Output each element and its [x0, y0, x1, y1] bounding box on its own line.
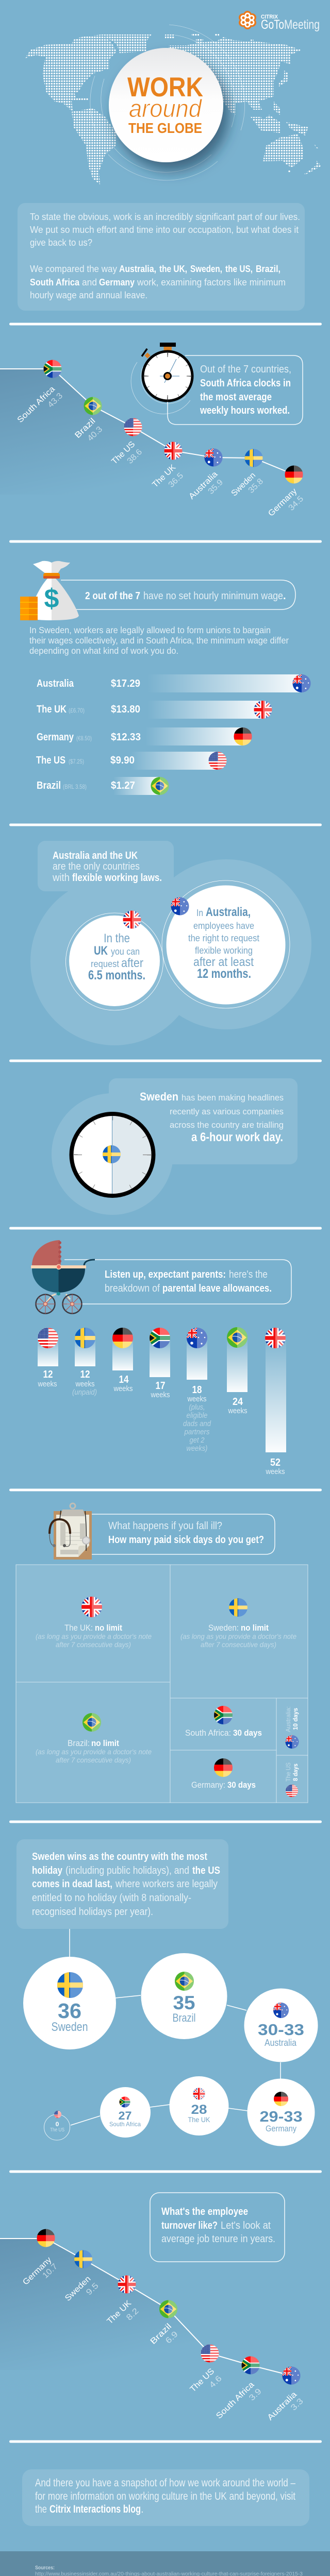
country labels: 35.9: [207, 478, 225, 496]
column: Sweden: 12: [80, 1369, 90, 1380]
column: South Africa: 17: [156, 1380, 165, 1392]
circle: Australia flexible working: Australia,: [206, 905, 251, 919]
country labels: 38.6: [126, 448, 144, 466]
logo: GoToMeeting: [239, 11, 320, 32]
text block: intro second paragraph: work, examining factors like minimum: [137, 277, 286, 287]
bubble: Sweden: [23, 1957, 116, 2049]
cell: Sweden: after 7 consecutive days): [201, 1640, 276, 1649]
title: [127, 72, 203, 136]
country labels: Sweden: [230, 471, 257, 498]
callout: parental leave: breakdown of: [105, 1283, 160, 1294]
callout: employee turnover: turnover like?: [161, 2220, 218, 2231]
cell: Brazil: after 7 consecutive days): [56, 1756, 131, 1764]
country labels: The US: [110, 440, 137, 466]
bar: UK: $13.80: [111, 704, 140, 715]
bar: US: The US: [36, 755, 65, 766]
text block: intro second paragraph: and: [82, 277, 97, 287]
column: Germany: [112, 1328, 133, 1393]
cell: Brazil: (as long as you provide a doctor's note: [36, 1748, 152, 1756]
circle: Australia flexible working: after at least: [193, 955, 254, 969]
stethoscope: [50, 1511, 90, 1551]
callout: minimum wage: 2 out of the 7: [85, 590, 140, 602]
title disc: [109, 48, 223, 162]
column: Australia: [183, 1328, 211, 1453]
bubble: US: [44, 2111, 70, 2140]
title: around: [129, 95, 202, 123]
column: Australia: 18: [192, 1384, 202, 1396]
bar: Brazil: (BRL 3.58): [63, 783, 87, 790]
bar: Germany: [37, 727, 252, 746]
divider: [9, 1489, 322, 1491]
country labels: 43.3: [46, 392, 64, 410]
bubble: UK: 28: [191, 2103, 207, 2117]
cell: Sweden: [180, 1598, 296, 1649]
circle: Australia flexible working: the right to request: [188, 933, 259, 943]
column: South Africa: [150, 1328, 170, 1399]
chart: sick days treemap: [16, 1565, 308, 1803]
bar: US: [36, 752, 227, 770]
country labels: Brazil: [73, 417, 97, 440]
panel: conclusion: [22, 2469, 309, 2526]
callout: minimum wage: .: [283, 590, 286, 602]
column: UK: [265, 1328, 286, 1476]
bubble: South Africa: South Africa: [109, 2121, 141, 2128]
country labels: 9.5: [85, 2281, 101, 2297]
icon: clock with Sweden flag: [71, 1114, 154, 1196]
bar: US: $9.90: [110, 755, 135, 766]
cell: South Africa: 30 days: [233, 1728, 262, 1738]
bar: Brazil: [37, 777, 169, 795]
text block: minimum wage detail: In Sweden, workers are legally allowed to form unions to bargain: [29, 625, 271, 635]
bubble: Brazil: Brazil: [172, 2011, 196, 2024]
text block: intro second paragraph: We compared the way: [30, 264, 117, 274]
cell: UK: (as long as you provide a doctor's note: [36, 1632, 152, 1640]
cell: Brazil: no limit: [91, 1738, 119, 1748]
country labels: Brazil: [148, 2322, 173, 2346]
title: WORK: [127, 72, 203, 103]
panel: holiday intro: the US: [192, 1865, 220, 1876]
divider: [9, 323, 322, 326]
text block: intro first paragraph: [30, 212, 300, 248]
decorative arcs around title: [90, 25, 245, 180]
column: UK: weeks: [266, 1467, 285, 1476]
circle: Australia flexible working: employees have: [193, 921, 254, 931]
circle: UK flexible working: after: [121, 956, 143, 970]
column: US: 12: [43, 1369, 53, 1380]
text block: intro second paragraph: South Africa: [30, 277, 80, 287]
circle: UK flexible working: UK: [94, 944, 108, 958]
divider: [9, 2440, 322, 2443]
circle: UK flexible working: 6.5 months.: [88, 968, 145, 982]
bubble: US: 0: [56, 2121, 59, 2128]
text block: minimum wage detail: their wages collectively, and in South Africa, the minimum wage differ: [29, 635, 289, 646]
country labels: 36.5: [167, 471, 185, 489]
cell: UK: The UK:: [64, 1623, 93, 1633]
panel: holiday intro: where workers are legally: [115, 1878, 218, 1890]
logo wordmark: CITRIX: [261, 14, 278, 20]
country labels: 6.9: [164, 2330, 180, 2346]
column: US: [38, 1328, 58, 1388]
circle: UK flexible working: In the: [104, 931, 130, 945]
callout: weekly hours: Out of the 7 countries,: [200, 364, 291, 375]
cell: South Africa: South Africa:: [185, 1728, 231, 1738]
divider: [9, 1227, 322, 1229]
text block: intro first paragraph: give back to us?: [30, 238, 92, 248]
column: Australia: weeks): [187, 1444, 208, 1453]
cell: Australia: 10 days: [292, 1708, 299, 1730]
column: Australia: get 2: [190, 1436, 205, 1445]
bubble: Australia: [244, 1989, 318, 2062]
bar: Brazil: Brazil: [37, 780, 61, 791]
panel: holiday intro: entitled to no holiday (with 8 nationally-: [32, 1892, 191, 1904]
bar chart: minimum wage: [36, 674, 310, 795]
icon: coins: [20, 597, 38, 620]
country labels: [16, 385, 305, 518]
country labels: 4.6: [208, 2374, 224, 2390]
pram wheels: [36, 1294, 82, 1314]
text block: Sweden six hour day: a 6-hour work day.: [191, 1130, 283, 1144]
cell: US: 8 days: [292, 1764, 299, 1781]
column: Australia: weeks: [187, 1395, 206, 1403]
cell: Sweden: no limit: [241, 1623, 269, 1633]
text block: minimum wage detail: [29, 625, 289, 656]
bubble: Germany: Germany: [266, 2124, 296, 2133]
column: South Africa: weeks: [151, 1391, 170, 1399]
column: Sweden: [72, 1328, 97, 1397]
bubble: UK: The UK: [188, 2115, 210, 2124]
column: Brazil: [227, 1327, 248, 1415]
circle: Australia flexible working: flexible working: [195, 945, 253, 956]
panel: flexible working background: [30, 841, 311, 1045]
callout: parental leave: [64, 1260, 291, 1304]
callout: weekly hours: weekly hours worked.: [200, 405, 290, 416]
cell: Sweden: (as long as you provide a doctor's note: [180, 1632, 296, 1640]
text block: intro second paragraph: Australia,: [119, 264, 156, 274]
callout: weekly hours: [168, 355, 303, 425]
callout: sick days: How many paid sick days do you get?: [108, 1534, 264, 1546]
bubble: South Africa: [100, 2087, 151, 2138]
callout: employee turnover: What's the employee: [161, 2206, 248, 2217]
column: Australia: dads and: [183, 1419, 211, 1428]
divider: [9, 2170, 322, 2173]
bubble: Sweden: 36: [58, 1999, 81, 2023]
bubble: South Africa: 27: [119, 2109, 132, 2122]
text block: flexible working laws: [52, 850, 162, 884]
country labels: 34.5: [287, 495, 305, 513]
panel: holiday intro: recognised holidays per year).: [32, 1906, 153, 1918]
bar: Germany: Germany: [37, 732, 74, 743]
country labels: Australia: [187, 470, 220, 501]
panel: sources: [0, 2551, 330, 2576]
country labels: 8.2: [125, 2307, 141, 2323]
column: Sweden: (unpaid): [72, 1388, 97, 1397]
panel: sources: Sources:: [35, 2565, 55, 2571]
callout: employee turnover: [150, 2193, 285, 2262]
country labels: 35.8: [247, 477, 265, 495]
divider: [9, 540, 322, 543]
text block: intro first paragraph: To state the obvious, work is an incredibly significant part of our lives.: [30, 212, 300, 222]
bubble: Sweden: Sweden: [52, 2020, 88, 2034]
callout: parental leave: Listen up, expectant parents:: [105, 1269, 226, 1280]
bar: US: ($7.25): [69, 758, 84, 765]
cell: US: [285, 1762, 299, 1797]
country labels: The UK: [151, 463, 178, 489]
bar: Brazil: $1.27: [111, 780, 135, 791]
cell: US: The US: [285, 1762, 292, 1782]
bar: UK: (£6.70): [69, 707, 85, 714]
text block: intro second paragraph: hourly wage and annual leave.: [30, 290, 147, 300]
callout: employee turnover: Let's look at: [221, 2220, 271, 2231]
cell: Brazil: Brazil:: [68, 1738, 90, 1748]
bar: Germany: $12.33: [111, 732, 141, 743]
logo wordmark: GoTo: [261, 18, 284, 32]
text block: intro first paragraph: We put so much effort and time into our occupation, but what does it: [30, 225, 299, 235]
country labels: 10.7: [41, 2262, 59, 2280]
column: US: weeks: [38, 1380, 57, 1388]
callout: parental leave: here's the: [229, 1269, 268, 1280]
bubble: Australia: 30-33: [258, 2021, 304, 2039]
callout: sick days: [92, 1514, 275, 1554]
cell: Sweden: Sweden:: [208, 1623, 239, 1633]
column: Sweden: weeks: [75, 1380, 95, 1388]
callout: parental leave: parental leave allowances.: [162, 1283, 272, 1294]
text block: flexible working laws: with: [52, 872, 70, 884]
bubble: Germany: 29-33: [260, 2109, 302, 2125]
callout: employee turnover: average job tenure in years.: [161, 2233, 275, 2245]
bar: Germany: (€8.50): [76, 735, 92, 742]
cell: South Africa: [185, 1706, 262, 1738]
bubble: US: The US: [50, 2127, 64, 2133]
text block: intro second paragraph: [30, 264, 286, 300]
country labels: The US: [189, 2367, 216, 2394]
icon: money bag: $: [44, 584, 59, 614]
panel: conclusion: Citrix Interactions blog: [50, 2503, 141, 2515]
bubble: Germany: [248, 2078, 315, 2146]
bar chart: parental leave: [38, 1327, 286, 1476]
text block: Sweden six hour day: Sweden: [140, 1090, 178, 1103]
cell: Germany: 30 days: [227, 1780, 256, 1790]
cell: UK: [36, 1597, 152, 1649]
bar: Australia: [37, 674, 310, 692]
country labels: South Africa: [16, 385, 57, 425]
logo wordmark: Meeting: [284, 18, 320, 32]
bar: UK: [37, 701, 272, 719]
panel: intro: [18, 203, 305, 311]
icon: GoToMeeting flower: [239, 11, 256, 29]
country labels: South Africa: [214, 2380, 256, 2420]
flags: [43, 360, 303, 484]
circle: UK flexible working: request: [91, 959, 119, 969]
text block: intro second paragraph: Germany: [99, 277, 135, 287]
title: THE GLOBE: [128, 120, 202, 136]
circle: Australia flexible working: In: [196, 908, 203, 918]
divider: [9, 1821, 322, 1823]
cell: Australia: [285, 1706, 299, 1749]
panel: holiday intro: holiday: [32, 1865, 63, 1876]
column: Australia: eligible: [187, 1411, 207, 1420]
chart: average job tenure: [0, 2229, 305, 2422]
panel: conclusion: .: [141, 2503, 144, 2515]
country labels: 3.3: [289, 2397, 305, 2413]
text block: Sweden six hour day: recently as various companies: [170, 1107, 284, 1116]
bar: Australia: Australia: [37, 678, 74, 689]
country labels: Germany: [21, 2256, 53, 2287]
bubble: Brazil: [141, 1953, 227, 2039]
panel: conclusion: the: [35, 2503, 47, 2515]
country labels: Sweden: [63, 2275, 93, 2303]
icon: pram: [31, 1240, 95, 1314]
column: UK: 52: [270, 1457, 280, 1468]
column: Brazil: weeks: [228, 1406, 248, 1415]
chart: holiday bubbles: [23, 1929, 318, 2146]
dotted world map: [25, 34, 321, 184]
country labels: 3.9: [248, 2387, 263, 2403]
cell: Germany: Germany:: [191, 1780, 225, 1790]
callout: sick days: What happens if you fall ill?: [108, 1520, 222, 1532]
flags: [37, 2229, 300, 2384]
circle: UK flexible working: you can: [111, 946, 140, 957]
country labels: The UK: [106, 2299, 133, 2326]
callout: weekly hours: the most average: [200, 392, 272, 403]
country labels: Australia: [266, 2390, 299, 2422]
logo wordmark: [261, 14, 320, 32]
bar: UK: The UK: [37, 704, 67, 715]
panel: holiday intro: Sweden wins as the country with the most: [32, 1851, 207, 1862]
country labels: Germany: [267, 487, 299, 518]
text block: Sweden six hour day: [140, 1090, 284, 1144]
panel: holiday intro: (including public holidays), and: [65, 1865, 189, 1876]
column: Germany: 14: [119, 1374, 129, 1385]
divider: [9, 1059, 322, 1062]
country labels: 40.3: [86, 425, 104, 443]
text block: intro second paragraph: Brazil,: [256, 264, 280, 274]
divider: [9, 823, 322, 826]
column: Australia: partners: [184, 1428, 210, 1436]
country labels: [21, 2256, 305, 2422]
bubble: Brazil: 35: [173, 1992, 195, 2013]
column: Australia: (plus,: [189, 1403, 205, 1412]
callout: weekly hours: South Africa clocks in: [200, 378, 291, 389]
text block: flexible working laws: Australia and the UK: [53, 850, 138, 861]
cell: UK: after 7 consecutive days): [56, 1640, 131, 1649]
callout: minimum wage: have no set hourly minimum wage: [143, 590, 283, 602]
text block: Sweden six hour day: across the country are trialling: [170, 1120, 284, 1130]
bubble: Australia: Australia: [265, 2038, 297, 2048]
bubble: UK: [169, 2076, 229, 2136]
text block: intro second paragraph: the US,: [225, 264, 253, 274]
circle: Australia flexible working: [162, 880, 290, 1008]
column: Brazil: 24: [233, 1396, 243, 1408]
column: Germany: weeks: [113, 1384, 133, 1393]
icon: stopwatch: [131, 343, 192, 414]
text block: intro second paragraph: the UK,: [159, 264, 187, 274]
cell: Germany: [191, 1758, 256, 1790]
text block: flexible working laws: are the only countries: [53, 861, 140, 872]
text block: flexible working laws: flexible working laws.: [72, 872, 162, 884]
bar: Australia: $17.29: [111, 678, 140, 689]
text block: intro second paragraph: Sweden,: [190, 264, 222, 274]
callout: minimum wage: [61, 580, 295, 609]
circle: Australia flexible working: 12 months.: [197, 967, 251, 981]
panel: holiday intro: comes in dead last,: [32, 1878, 112, 1890]
text block: Sweden six hour day: has been making headlines: [182, 1093, 284, 1103]
panel: six hour day background: [52, 1078, 298, 1215]
circle: UK flexible working: [66, 911, 163, 1010]
text block: minimum wage detail: depending on what kind of work you do.: [29, 646, 178, 656]
icon: clipboard and stethoscope: [50, 1503, 92, 1560]
chart: average weekly hours: [0, 360, 305, 518]
panel: holiday intro: [16, 1839, 228, 1929]
cell: Australia: Australia:: [285, 1706, 292, 1732]
cell: Brazil: [36, 1713, 152, 1764]
icon: money bag: [20, 561, 79, 620]
cell: UK: no limit: [95, 1623, 122, 1633]
